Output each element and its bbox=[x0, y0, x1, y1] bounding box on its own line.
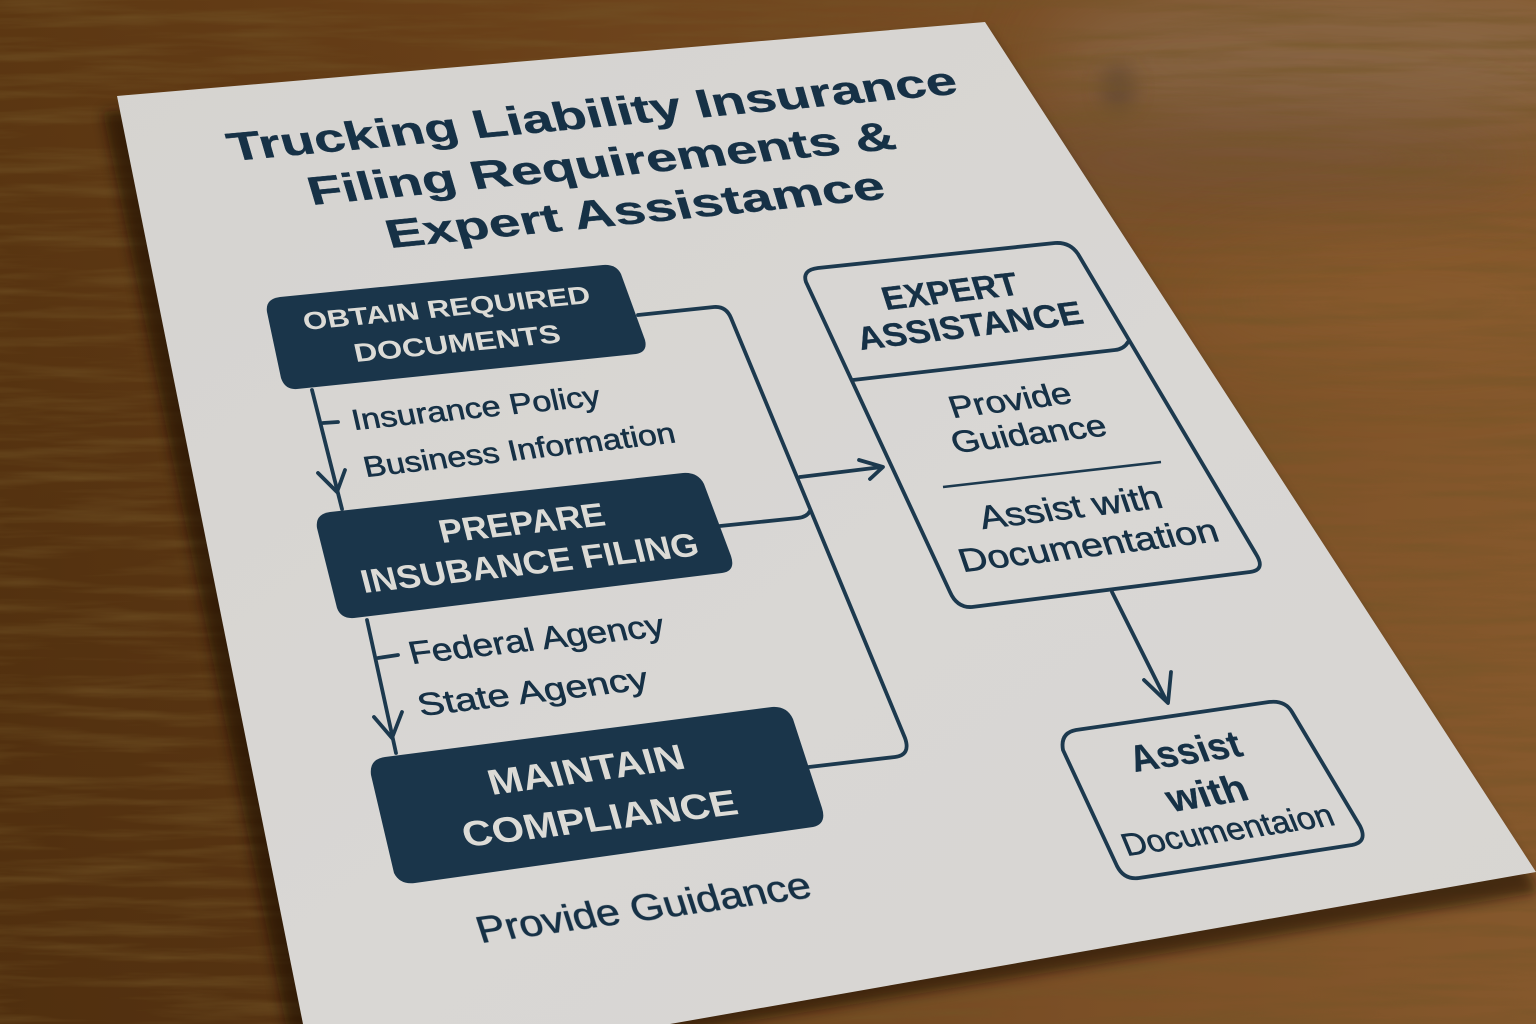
panel item: assist with documentation: Documentation bbox=[954, 513, 1224, 580]
panel item: provide guidance: Provide bbox=[944, 376, 1076, 425]
title: Expert Assistamce bbox=[379, 163, 890, 257]
connector: prepare filing to side line bbox=[720, 511, 810, 526]
arrow: step 2 to step 3 bbox=[367, 620, 402, 753]
list: required documents: Insurance Policy bbox=[348, 381, 604, 437]
panel item: assist with documentation: Assist with bbox=[974, 480, 1167, 537]
title: Filing Requirements & bbox=[301, 113, 901, 214]
step 3: maintain compliance: MAINTAIN bbox=[482, 736, 690, 803]
step 3: maintain compliance: COMPLIANCE bbox=[457, 782, 742, 855]
panel heading bbox=[852, 266, 1088, 358]
step 1: obtain required documents: DOCUMENTS bbox=[351, 319, 563, 368]
list: filing agencies: Federal Agency bbox=[404, 607, 669, 671]
caption: provide guidance: Provide Guidance bbox=[470, 864, 816, 951]
step 2: prepare insurance filing: PREPARE bbox=[435, 497, 609, 551]
list: filing agencies: State Agency bbox=[413, 660, 653, 723]
step 3: maintain compliance bbox=[371, 707, 823, 883]
step 1: obtain required documents: OBTAIN REQUIRED bbox=[300, 281, 593, 336]
arrow: to expert assistance bbox=[800, 460, 883, 479]
panel item: provide guidance bbox=[944, 376, 1111, 460]
panel heading: EXPERT bbox=[877, 266, 1024, 318]
step 2: prepare insurance filing bbox=[317, 473, 732, 618]
panel item: provide guidance: Guidance bbox=[946, 408, 1111, 460]
list: required documents: Business Information bbox=[360, 418, 679, 484]
list: required documents bbox=[323, 381, 679, 484]
panel heading: ASSISTANCE bbox=[852, 295, 1088, 358]
panel header divider bbox=[853, 342, 1128, 380]
panel item: assist with documentation bbox=[954, 480, 1224, 580]
title: Trucking Liability Insurance bbox=[222, 58, 962, 170]
connector: outer feedback line linking steps to expert assistance bbox=[638, 307, 907, 767]
box: assist with documentation bbox=[1063, 702, 1363, 878]
title bbox=[222, 58, 962, 257]
box: assist with documentation: Assist bbox=[1122, 724, 1248, 780]
arrow: step 1 to step 2 bbox=[312, 390, 345, 509]
panel outline bbox=[805, 243, 1260, 607]
box: assist with documentation: Documentaion bbox=[1116, 797, 1339, 863]
list: filing agencies bbox=[378, 607, 669, 723]
box: assist with documentation: with bbox=[1158, 768, 1254, 821]
arrow: expert assistance to documentation box bbox=[1112, 592, 1171, 703]
step 1: obtain required documents bbox=[267, 265, 646, 389]
panel: expert assistance bbox=[805, 243, 1260, 607]
step 2: prepare insurance filing: INSUBANCE FILING bbox=[357, 527, 703, 601]
